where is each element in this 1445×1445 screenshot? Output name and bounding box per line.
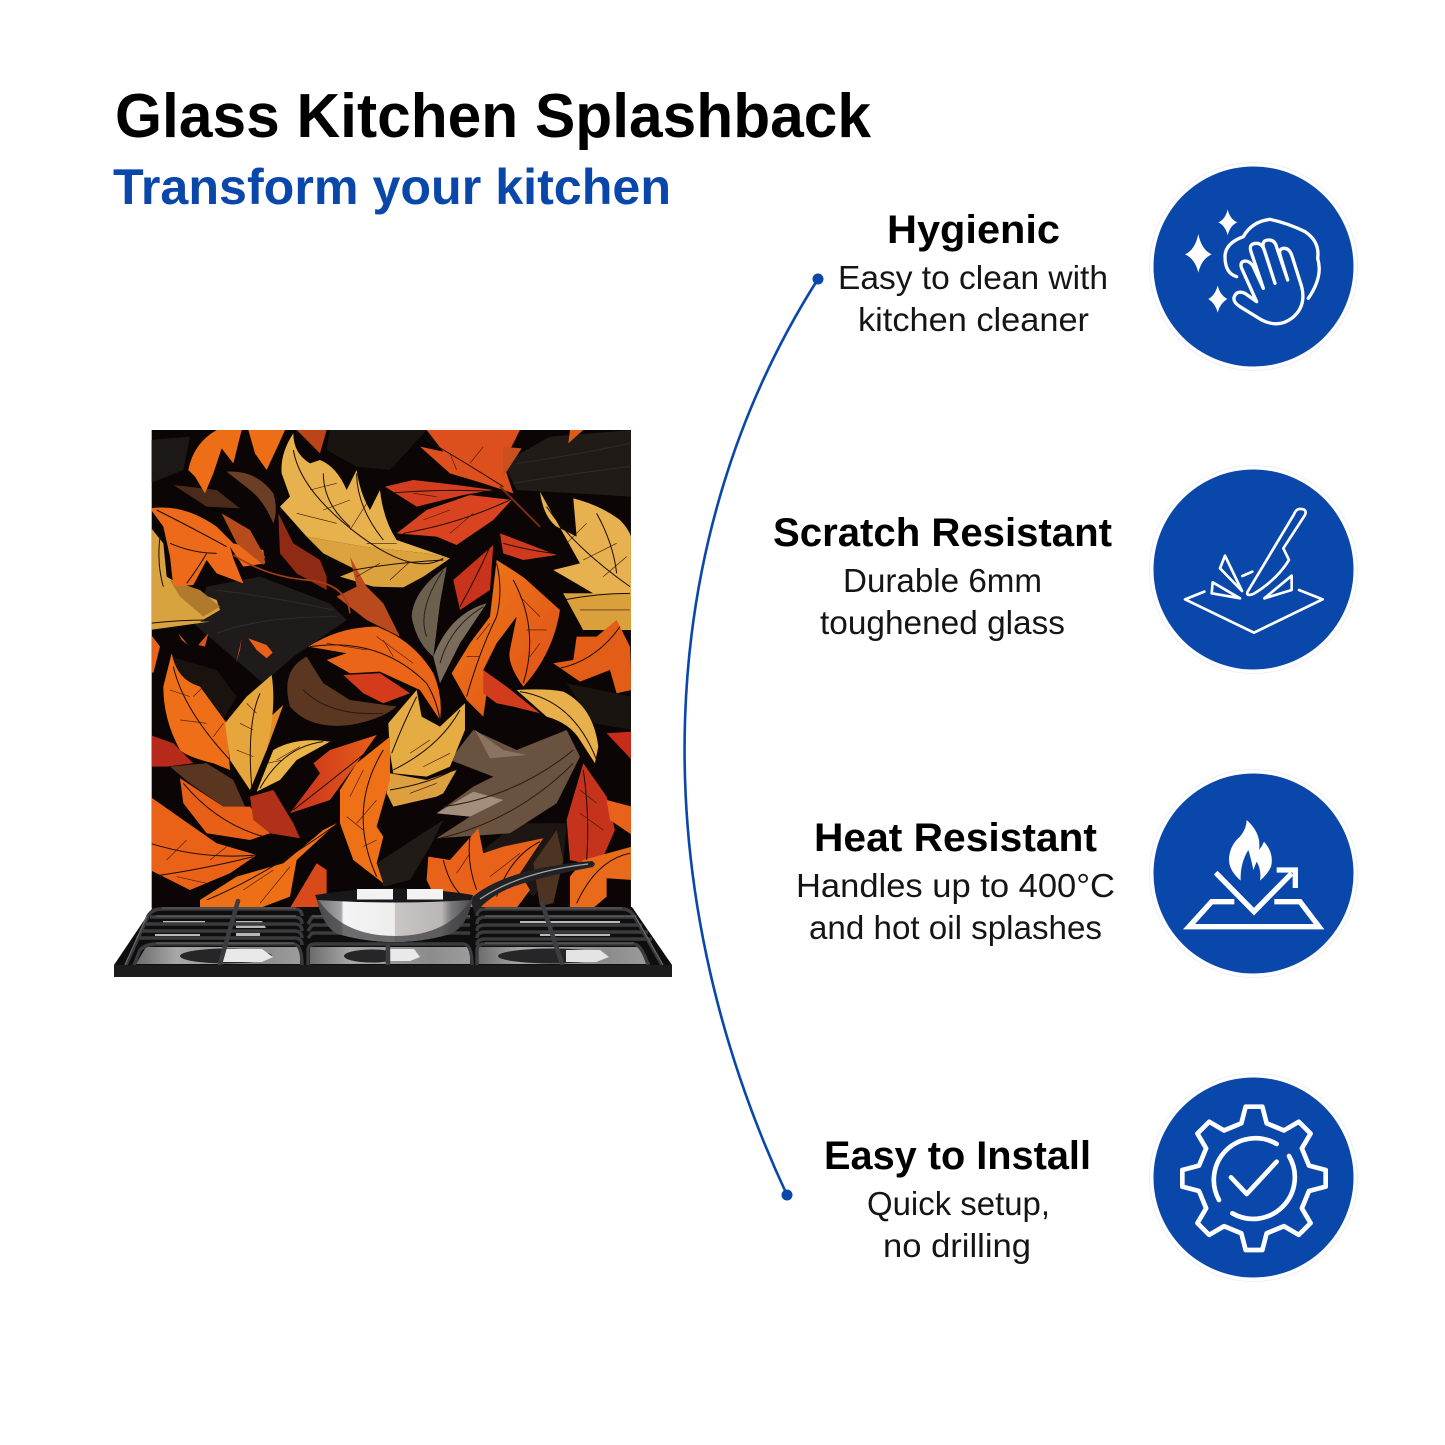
icon: flame and heat deflection — [1150, 770, 1358, 978]
feature: easy to install: no drilling — [883, 1227, 1031, 1264]
hob front edge — [114, 965, 672, 977]
splashback panel: autumn leaves — [150, 430, 632, 908]
product image: splashback with leaf pattern and hob — [114, 430, 672, 977]
gas hob with pan — [114, 861, 672, 977]
feature: easy to install: Easy to Install — [824, 1134, 1091, 1178]
feature: hygienic: kitchen cleaner — [858, 301, 1089, 338]
feature: scratch resistant — [773, 511, 1112, 641]
title: Glass Kitchen Splashback — [115, 82, 871, 151]
feature: easy to install: Quick setup, — [867, 1185, 1050, 1222]
feature: heat resistant: Heat Resistant — [814, 816, 1097, 860]
burner crowns under grates — [155, 921, 620, 936]
feature: heat resistant: and hot oil splashes — [809, 909, 1102, 946]
feature: easy to install — [824, 1134, 1091, 1264]
feature: hygienic: Easy to clean with — [838, 259, 1108, 296]
icon: knife on glass — [1150, 466, 1358, 674]
connecting curve — [685, 274, 824, 1200]
feature: scratch resistant: toughened glass — [820, 604, 1065, 641]
support bars — [220, 901, 562, 964]
feature: heat resistant — [796, 816, 1115, 946]
feature: scratch resistant: Durable 6mm — [843, 562, 1042, 599]
feature: heat resistant: Handles up to 400°C — [796, 867, 1115, 904]
subtitle: Transform your kitchen — [113, 159, 671, 215]
grates — [126, 909, 662, 965]
feature: hygienic: Hygienic — [887, 208, 1060, 252]
pan — [315, 861, 595, 942]
icon: hand wiping — [1150, 162, 1358, 370]
hob base — [114, 907, 672, 977]
steel plates and burners — [136, 947, 650, 964]
feature: hygienic — [838, 208, 1108, 338]
icon: gear with check — [1150, 1074, 1358, 1282]
grate highlights — [125, 908, 663, 965]
feature: scratch resistant: Scratch Resistant — [773, 511, 1112, 555]
